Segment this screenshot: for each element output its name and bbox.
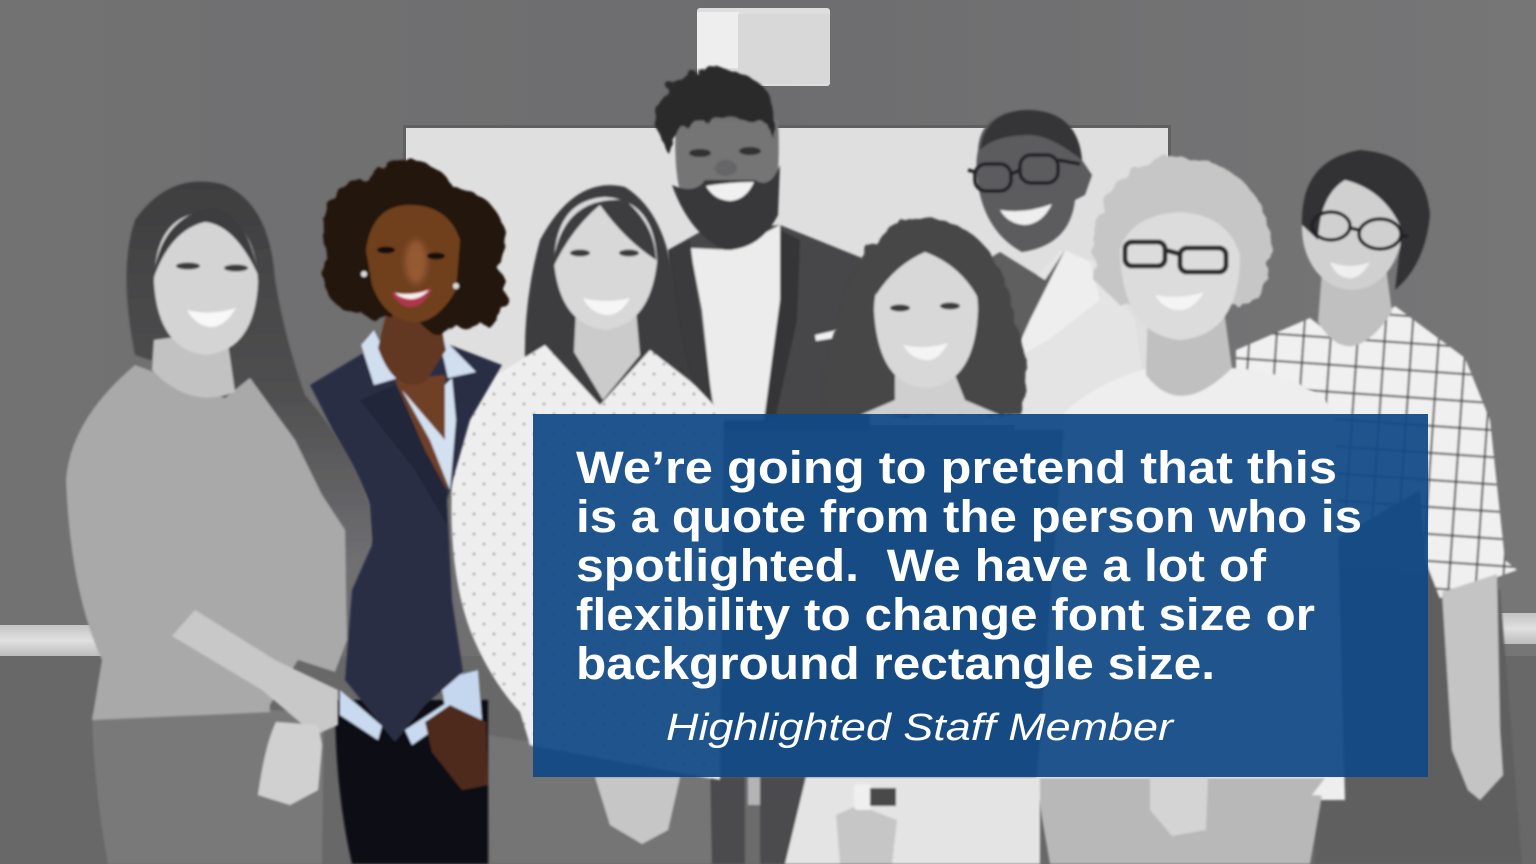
lower wall (0, 656, 1536, 864)
quote panel (533, 414, 1428, 777)
sweater (66, 365, 347, 720)
quote text: is a quote from the person who is (576, 491, 1362, 542)
quote text: We’re going to pretend that this (576, 442, 1337, 493)
person: woman in white trousers, centre (710, 216, 1040, 864)
projector (697, 8, 830, 86)
quote text (576, 442, 1362, 689)
person: man in suit, back centre (655, 69, 870, 430)
hands (425, 705, 488, 790)
grey trousers (92, 710, 324, 864)
person: woman in checked shirt, far right (1236, 150, 1522, 864)
whiteboard (403, 125, 1171, 425)
long hair (126, 182, 372, 575)
attribution: Highlighted Staff Member (666, 707, 1175, 749)
navy blazer (310, 345, 502, 742)
quote text: background rectangle size. (576, 638, 1215, 689)
man's legs behind (710, 777, 805, 864)
person: older woman with glasses (1035, 156, 1345, 864)
sleeve cuff and hands (172, 610, 338, 735)
black trousers (335, 700, 488, 864)
person: woman in sweater, left (66, 182, 372, 864)
person: woman with long hair in dotted blouse (451, 185, 724, 864)
quote text: spotlighted. We have a lot of (576, 540, 1267, 591)
skin and shirt at neckline (395, 375, 447, 490)
quote text: flexibility to change font size or (576, 589, 1315, 640)
wall ledge right (1490, 613, 1536, 644)
afro hair (321, 160, 506, 334)
blue shirt cuffs (340, 670, 482, 745)
person: spotlighted woman in full colour (310, 160, 506, 864)
wall ledge left (0, 625, 112, 656)
person: man with glasses, back right (968, 110, 1150, 430)
